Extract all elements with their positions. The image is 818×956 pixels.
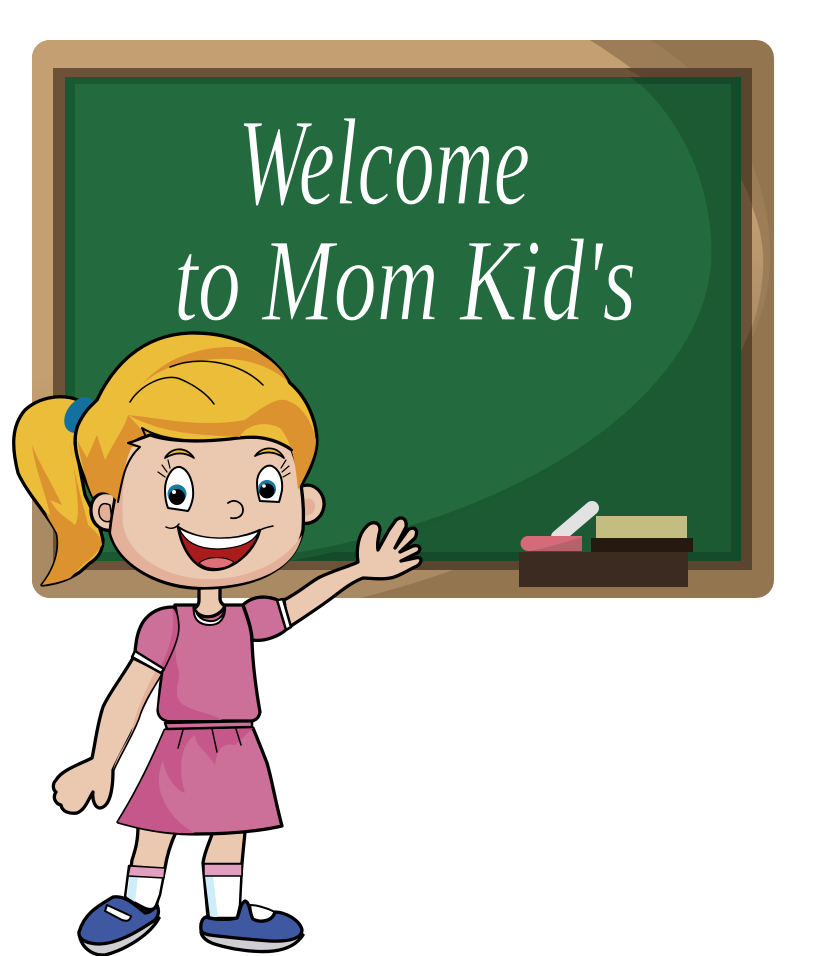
right sock band <box>204 864 242 876</box>
skirt shadow <box>118 728 253 833</box>
right sleeve <box>243 597 291 640</box>
dress skirt <box>118 728 282 834</box>
icon: chalk stick <box>558 508 592 537</box>
shoes <box>79 897 303 955</box>
left sock shade <box>127 876 138 902</box>
ponytail <box>14 397 103 585</box>
board inner dark frame <box>53 68 763 570</box>
left arm and hand <box>53 658 162 813</box>
right cuff <box>277 599 291 630</box>
panel: chalkboard <box>32 40 774 598</box>
teeth <box>179 528 259 549</box>
hair top highlight shadow <box>130 347 288 402</box>
left sleeve <box>132 607 178 673</box>
heading line 1: Welcome <box>238 94 530 231</box>
right sock shade <box>205 876 218 917</box>
nose <box>228 501 243 518</box>
right arm and waving hand <box>284 518 421 628</box>
icon: pink eraser <box>520 536 582 551</box>
left eye <box>158 460 193 511</box>
legs and socks <box>125 825 245 918</box>
heading line 2: to Mom Kid's <box>174 215 636 346</box>
left shoe strap <box>105 905 131 921</box>
tongue <box>199 558 234 569</box>
face <box>110 435 303 588</box>
bodice shadow <box>159 606 222 720</box>
hair tie <box>58 392 102 438</box>
left shoe <box>79 897 158 944</box>
right shoe sole <box>201 930 303 952</box>
chalk tray ledge <box>519 552 688 587</box>
icon: board eraser <box>591 516 693 552</box>
hair back <box>75 333 317 505</box>
left cuff <box>132 651 164 673</box>
left sock <box>125 866 165 909</box>
right shoe gap <box>250 905 275 920</box>
hairline edge <box>118 428 292 502</box>
hair front shadow <box>128 400 316 490</box>
heading: chalk writing <box>174 94 636 346</box>
right eyebrow <box>255 448 284 458</box>
green writing surface <box>65 77 741 561</box>
left shoe sole <box>79 918 159 955</box>
girl character <box>14 333 421 955</box>
dress waist belt <box>165 721 252 729</box>
right leg <box>203 832 245 917</box>
dress bodice <box>158 605 260 721</box>
right ear <box>300 485 324 523</box>
left ear <box>91 493 115 530</box>
left leg <box>127 825 176 912</box>
mouth <box>166 524 273 570</box>
left sleeve shadow <box>160 608 178 670</box>
left eyebrow <box>165 449 194 458</box>
left sock band <box>128 866 165 878</box>
board wooden frame <box>32 40 774 598</box>
skirt folds <box>178 729 241 752</box>
hair strands <box>130 361 263 404</box>
right eye <box>257 460 290 502</box>
right sock <box>204 864 242 918</box>
face shadow <box>111 445 302 587</box>
hair front left shadow <box>77 415 148 502</box>
ponytail shadow <box>32 440 102 585</box>
neck <box>194 586 225 617</box>
collar <box>194 605 225 625</box>
left arm shadow <box>113 672 162 770</box>
smile corners <box>166 524 273 530</box>
